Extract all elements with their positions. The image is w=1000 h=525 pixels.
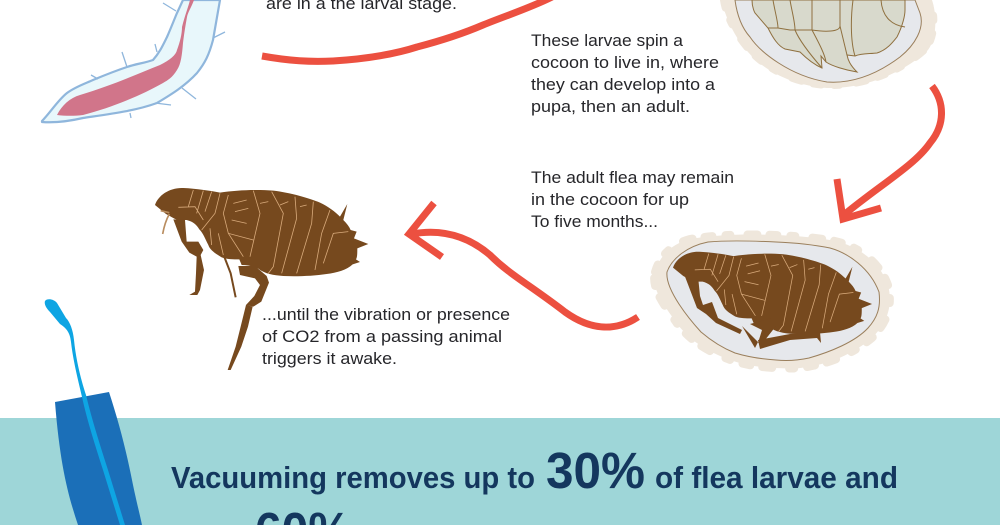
heading: vacuuming statistic: 30% xyxy=(546,442,645,499)
text: vibration or CO2: ...until the vibration or presence xyxy=(262,305,510,324)
flea antennae xyxy=(161,211,169,234)
text: larvae spin a cocoon: These larvae spin a xyxy=(531,31,684,50)
text: larvae spin a cocoon: pupa, then an adult. xyxy=(531,97,690,116)
text: larvae spin a cocoon xyxy=(531,31,719,116)
illustration: pupa in cocoon xyxy=(722,0,935,88)
illustration: adult flea xyxy=(155,188,368,370)
heading: vacuuming statistic: Vacuuming removes up to xyxy=(171,460,535,495)
text: adult flea may remain: To five months... xyxy=(531,212,658,231)
background teal band xyxy=(0,418,1000,525)
flea body inside cocoon xyxy=(673,252,872,334)
flea legs inside cocoon xyxy=(684,274,821,349)
arrow: larva to pupa xyxy=(262,0,552,61)
text: vibration or CO2: of CO2 from a passing animal xyxy=(262,327,502,346)
icon: vacuum cleaner xyxy=(45,299,142,525)
text: adult flea may remain: in the cocoon for up xyxy=(531,190,689,209)
text: vibration or CO2 xyxy=(262,305,510,368)
heading: vacuuming statistic: of flea larvae and xyxy=(655,460,898,495)
text: adult flea may remain xyxy=(531,168,734,231)
text: larvae spin a cocoon: cocoon to live in, where xyxy=(531,53,719,72)
arrow: cocoon to awake adult xyxy=(409,203,638,327)
arrow: pupa to adult in cocoon xyxy=(837,86,942,219)
illustration: flea larva xyxy=(42,0,225,122)
text: vibration or CO2: triggers it awake. xyxy=(262,349,397,368)
flea legs xyxy=(173,219,269,370)
illustration: adult flea in cocoon xyxy=(654,234,890,368)
heading: vacuuming statistic xyxy=(171,442,898,525)
text: adult flea may remain: The adult flea may remain xyxy=(531,168,734,187)
text: larvae spin a cocoon: they can develop into a xyxy=(531,75,716,94)
